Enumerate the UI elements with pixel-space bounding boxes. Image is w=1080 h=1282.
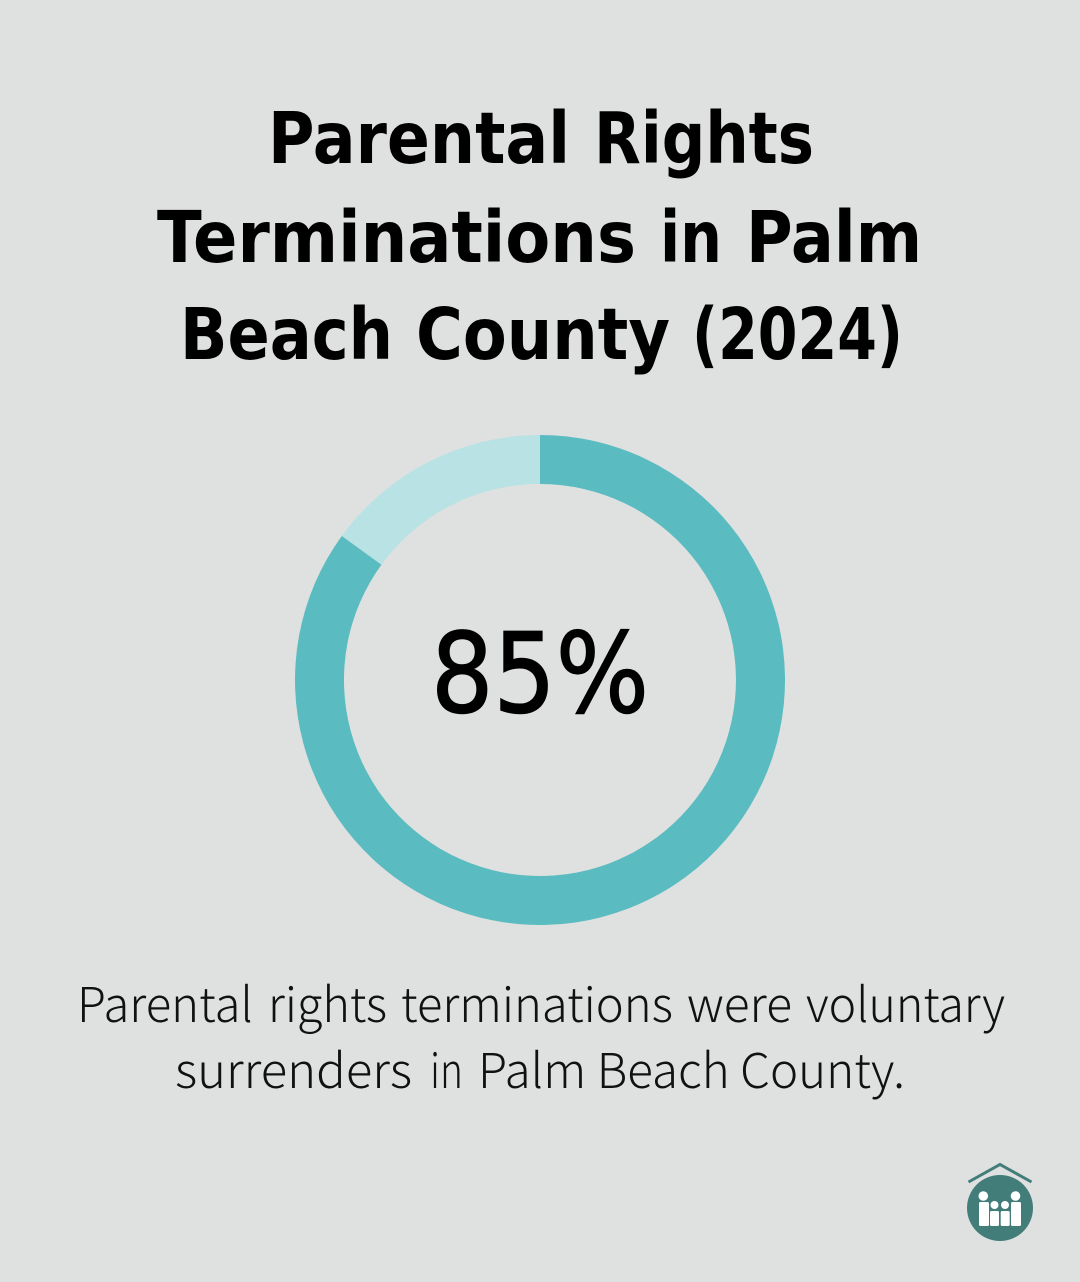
- title: Rights: [594, 97, 814, 180]
- description text: terminations: [401, 966, 673, 1036]
- 85% segment: [295, 435, 785, 925]
- roof: [968, 1164, 1032, 1182]
- title: Parental: [268, 97, 570, 180]
- title: [157, 97, 922, 376]
- center value: 85%: [431, 610, 649, 739]
- title: in: [660, 196, 722, 279]
- family figures: [978, 1191, 1021, 1226]
- title: Palm: [746, 196, 922, 279]
- remaining 15% segment: [342, 435, 540, 565]
- title: County: [416, 293, 670, 376]
- logo icon: house with family: [967, 1164, 1033, 1241]
- badge: [967, 1175, 1033, 1241]
- description text: voluntary: [806, 966, 1005, 1036]
- description text: surrenders: [175, 1032, 412, 1102]
- title: (2024): [692, 293, 903, 376]
- description text: Palm Beach County.: [478, 1032, 905, 1102]
- title: Terminations: [157, 196, 636, 279]
- donut chart: 85%: [295, 435, 785, 925]
- description text: were: [687, 966, 792, 1036]
- description text: [77, 966, 1005, 1102]
- title: Beach: [180, 293, 393, 376]
- description text: in: [430, 1032, 463, 1102]
- description text: Parental: [77, 966, 253, 1036]
- description text: rights: [268, 966, 387, 1036]
